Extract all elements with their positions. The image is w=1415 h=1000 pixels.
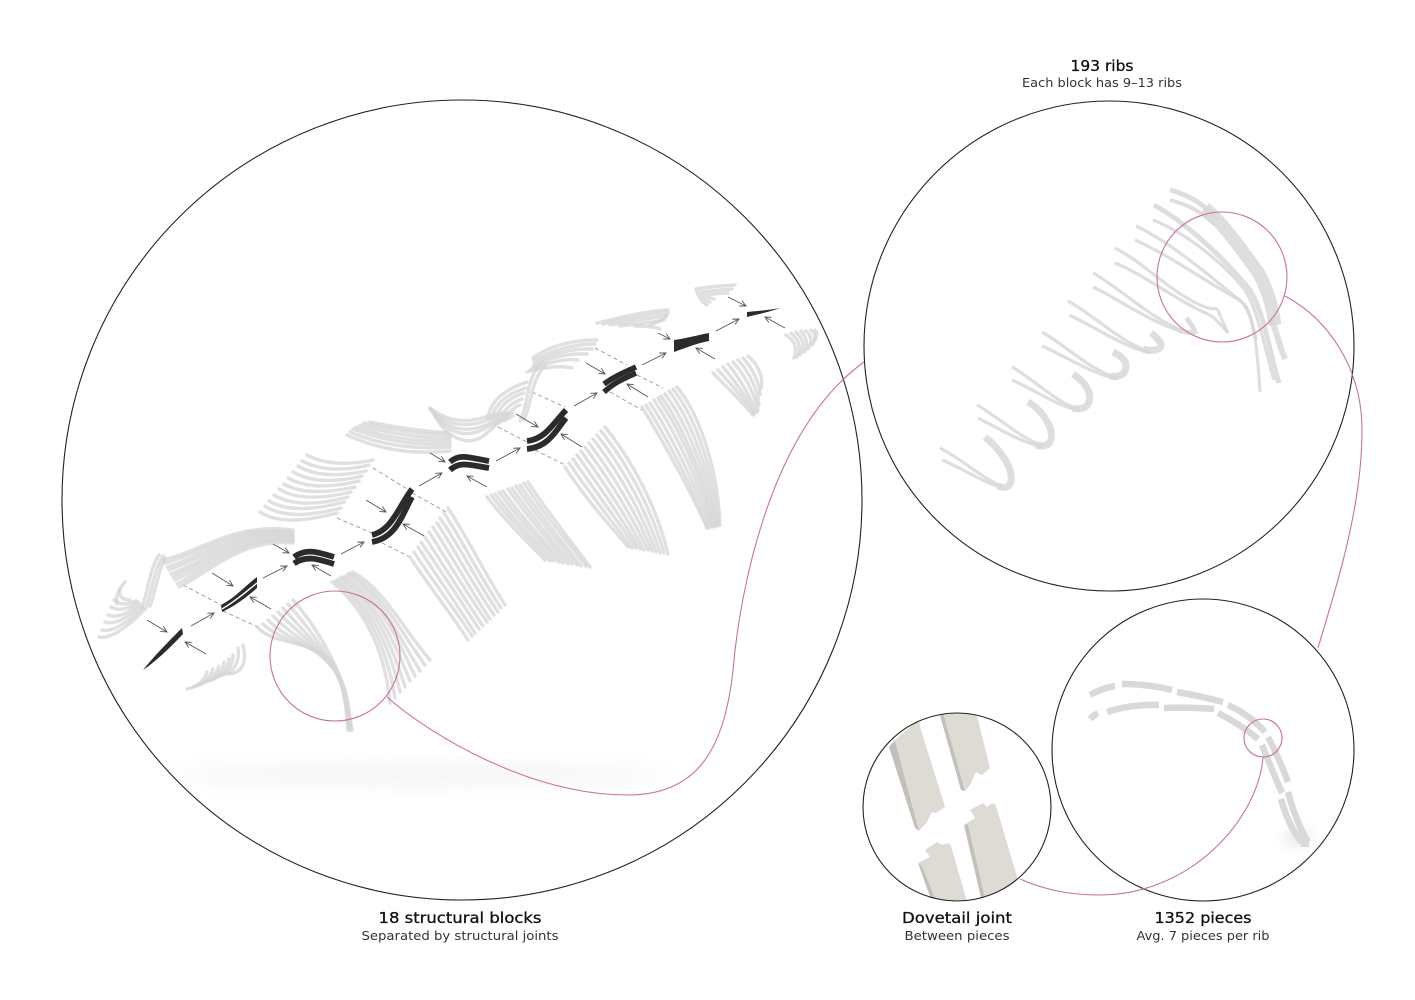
panel: 193 ribs [864,101,1354,591]
connector: blocks to ribs [387,362,864,795]
highlight circle on rib block [270,591,400,721]
ribs: block 9 top [696,285,735,305]
base shadow [1284,828,1312,848]
caption: 1352 pieces: Avg. 7 pieces per rib [1136,929,1270,943]
beam: top left [889,720,945,831]
caption: dovetail joint: Between pieces [904,929,1010,943]
highlight circle on rib [1157,212,1287,342]
beam: bottom right [964,803,1018,902]
ribs: block 2 bottom [258,600,352,730]
ribs: block 9 bottom [786,330,817,358]
panel: 1352 pieces [1052,599,1354,901]
caption: 1352 pieces: 1352 pieces [1154,909,1252,927]
ribs: block 2 top [142,529,293,608]
caption: dovetail joint: Dovetail joint [902,909,1012,927]
dovetail beams [889,712,1018,905]
assembly arrows [147,297,785,654]
ribs: block 5 top [430,382,527,441]
circle: dovetail [863,713,1051,901]
ribs: block 1 top [99,582,144,637]
highlight circle on joint [1244,719,1282,757]
circle: structural blocks [62,100,862,900]
ribs: block 7 bottom [642,387,720,528]
dashed guide lines [183,348,663,628]
ribs: block 8 bottom [713,356,762,415]
circle: ribs [864,101,1354,591]
caption: 193 ribs: 193 ribs [1070,57,1134,75]
ribs: block 7 top [597,310,668,329]
connector: pieces to dovetail [1020,757,1263,895]
ribs: block 3 bottom [332,572,430,703]
caption: 18 structural blocks: Separated by structural joints [362,929,558,943]
ribs: block 4 bottom [410,508,505,640]
ribs: block 3 top [260,455,373,520]
ribs: block 5 bottom [487,482,590,567]
beam: bottom left [918,842,968,905]
segmented rib pieces [1090,684,1309,843]
panel: dovetail joint [863,712,1051,905]
caption: 18 structural blocks [362,909,558,943]
caption: 1352 pieces [1136,909,1270,943]
ribs: block 6 top [520,340,597,421]
caption: 193 ribs [1022,57,1182,90]
connector: ribs to pieces [1285,296,1362,648]
ground shadow [170,768,670,782]
ribs: block 4 top [347,422,450,452]
caption: dovetail joint [902,909,1012,943]
caption: 193 ribs: Each block has 9–13 ribs [1022,76,1182,90]
caption: 18 structural blocks: 18 structural blocks [378,909,542,927]
ribs: block 6 bottom [565,427,668,554]
panel: 18 structural blocks [62,100,862,900]
ribs: block 1 bottom [187,645,245,689]
structural joints (black) [143,308,780,670]
ribs of one block [940,190,1285,488]
circle: pieces [1052,599,1354,901]
beam: top right [939,712,990,791]
